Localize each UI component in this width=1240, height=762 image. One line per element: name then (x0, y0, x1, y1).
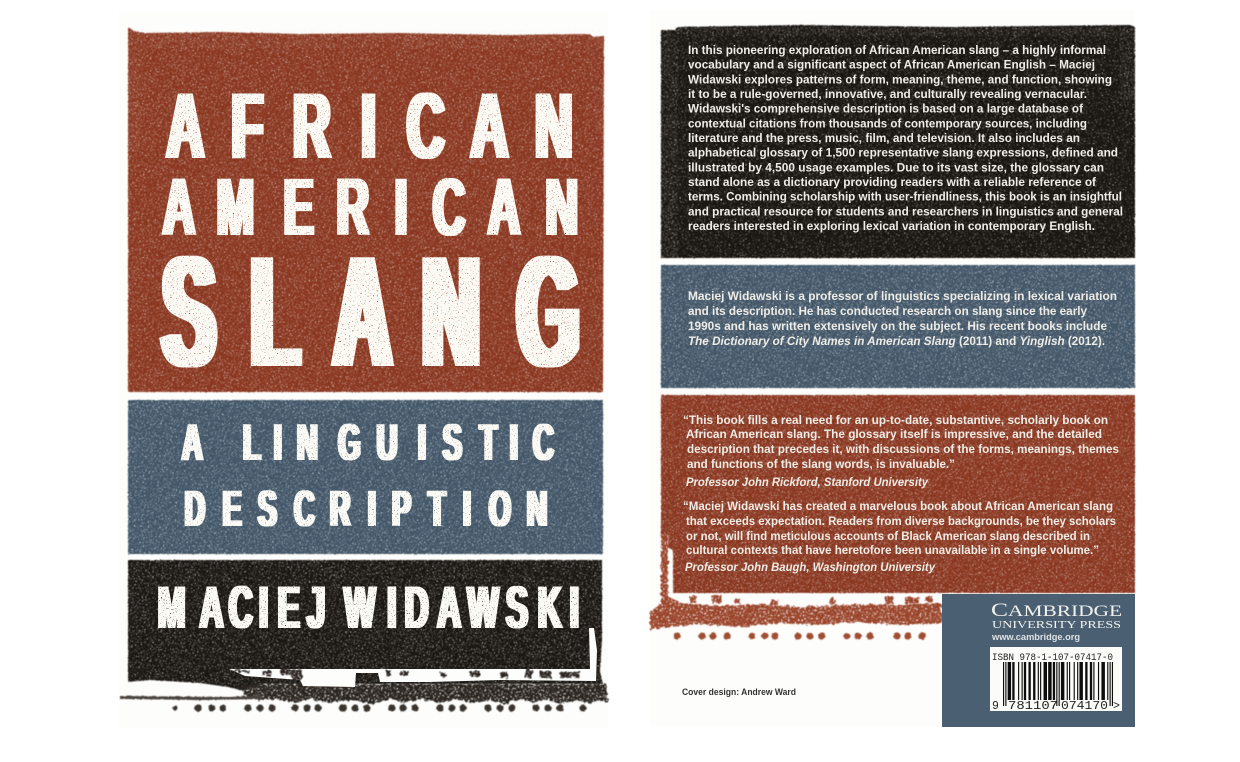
text: book description: In this pioneering exploration of African American slang – a highly informal (688, 43, 1106, 57)
text: author biography: 1990s and has written extensively on the subject. His recent books include (688, 319, 1107, 333)
panel: black description block (661, 25, 1135, 258)
quote: John Rickford (683, 413, 1119, 489)
panel: front cover (119, 11, 608, 728)
text: book description: it to be a rule-governed, innovative, and culturally revealing vernacular. (688, 87, 1087, 101)
title: African American Slang: SLANG (162, 224, 579, 400)
quote: John Baugh: “Maciej Widawski has created a marvelous book about African American slang (683, 499, 1113, 513)
panel: red reviews block (661, 395, 1135, 593)
panel: back cover (650, 10, 1135, 727)
text: author biography: The Dictionary of City Names in American Slang (2011) and Yinglish (2012). (688, 334, 1105, 348)
quote: John Baugh: or not, will find meticulous accounts of Black American slang described in (686, 529, 1090, 543)
text: book description: alphabetical glossary of 1,500 representative slang expressions, defined and (688, 146, 1118, 160)
panel: red title block (128, 27, 604, 400)
text: book description: and practical resource for students and researchers in linguistics and general (688, 204, 1123, 218)
worn left edge on black block (661, 27, 1135, 258)
quote: John Rickford: African American slang. The glossary itself is impressive, and the detailed (686, 427, 1102, 441)
publisher logo text (991, 601, 1122, 643)
subtitle: A Linguistic Description (175, 413, 565, 537)
subtitle: A Linguistic Description: A LINGUISTIC (182, 413, 554, 471)
text: book description: vocabulary and a significant aspect of African American English – Maciej (688, 58, 1095, 72)
thin ink line at left of smear (120, 695, 262, 700)
text: book description: terms. Combining scholarship with user-friendliness, this book is an insightful (688, 190, 1122, 204)
quote: John Rickford: and functions of the slang words, is invaluable.” (687, 457, 955, 471)
publisher logo text: www.cambridge.org (991, 632, 1080, 643)
barcode: > (1113, 700, 1120, 713)
quote: John Baugh (683, 499, 1116, 574)
publisher logo text: UNIVERSITY PRESS (992, 620, 1121, 631)
text: book description: illustrated by 4,500 usage examples. Due to its vast size, the glossary can (688, 160, 1104, 174)
red flecks in smear gap (690, 595, 933, 605)
dark flecks in smear gap (232, 669, 580, 680)
credit: cover design: Cover design: Andrew Ward (682, 687, 796, 698)
barcode: 074170 (1061, 700, 1108, 713)
printed dots row (173, 704, 587, 712)
barcode: 9 (992, 700, 999, 713)
text: book description: Widawski explores patterns of form, meaning, theme, and function, showing (688, 72, 1112, 86)
printed dots row (673, 632, 926, 640)
title: African American Slang: AMERICAN (163, 162, 578, 252)
subtitle: A Linguistic Description: DESCRIPTION (185, 480, 547, 537)
quote: John Baugh: that exceeds expectation. Readers from diverse backgrounds, be they scholars (686, 514, 1116, 528)
text: author biography: and its description. He has conducted research on slang since the early (688, 304, 1087, 318)
barcode (990, 647, 1122, 713)
text: book description: literature and the press, music, film, and television. It also includes an (688, 131, 1080, 145)
smear gaps under author block (229, 628, 597, 687)
title: African American Slang (150, 74, 590, 400)
text: book description: stand alone as a dictionary providing readers with a reliable reference of (688, 175, 1097, 189)
barcode: 781107 (1008, 700, 1058, 713)
text: book description: readers interested in exploring lexical variation in contemporary English. (688, 219, 1095, 233)
text: book description: Widawski's comprehensive description is based on a large database of (688, 102, 1084, 116)
quote: John Rickford: description that precedes it, with discussions of the forms, meanings, themes (687, 442, 1119, 456)
ink smear under reviews block (650, 535, 942, 640)
quote: John Baugh: cultural contexts that have heretofore been unavailable in a single volume.” (686, 543, 1099, 557)
panel: black author block (120, 560, 608, 712)
title: African American Slang: AFRICAN (167, 74, 572, 179)
quote: John Rickford: Professor John Rickford, Stanford University (686, 475, 929, 489)
author name: MACIEJ WIDAWSKI (158, 575, 579, 642)
panel: blue subtitle block (128, 400, 603, 554)
panel: publisher and barcode (942, 594, 1135, 727)
text: review quotes (683, 413, 1119, 574)
quote: John Baugh: Professor John Baugh, Washington University (685, 560, 936, 574)
barcode: ISBN 978-1-107-07417-0 (992, 653, 1113, 664)
worn edge on red title block (128, 30, 604, 150)
smear band texture (238, 684, 608, 704)
text: author biography (688, 289, 1117, 348)
publisher logo text: C AMBRIDGE (991, 601, 1122, 621)
quote: John Rickford: “This book fills a real need for an up-to-date, substantive, scholarly book on (683, 413, 1108, 427)
text: book description (688, 43, 1123, 233)
text: author biography: Maciej Widawski is a professor of linguistics specializing in lexical variation (688, 289, 1117, 303)
text: book description: contextual citations from thousands of contemporary sources, including (688, 116, 1087, 130)
panel: blue author biography block (661, 265, 1135, 388)
